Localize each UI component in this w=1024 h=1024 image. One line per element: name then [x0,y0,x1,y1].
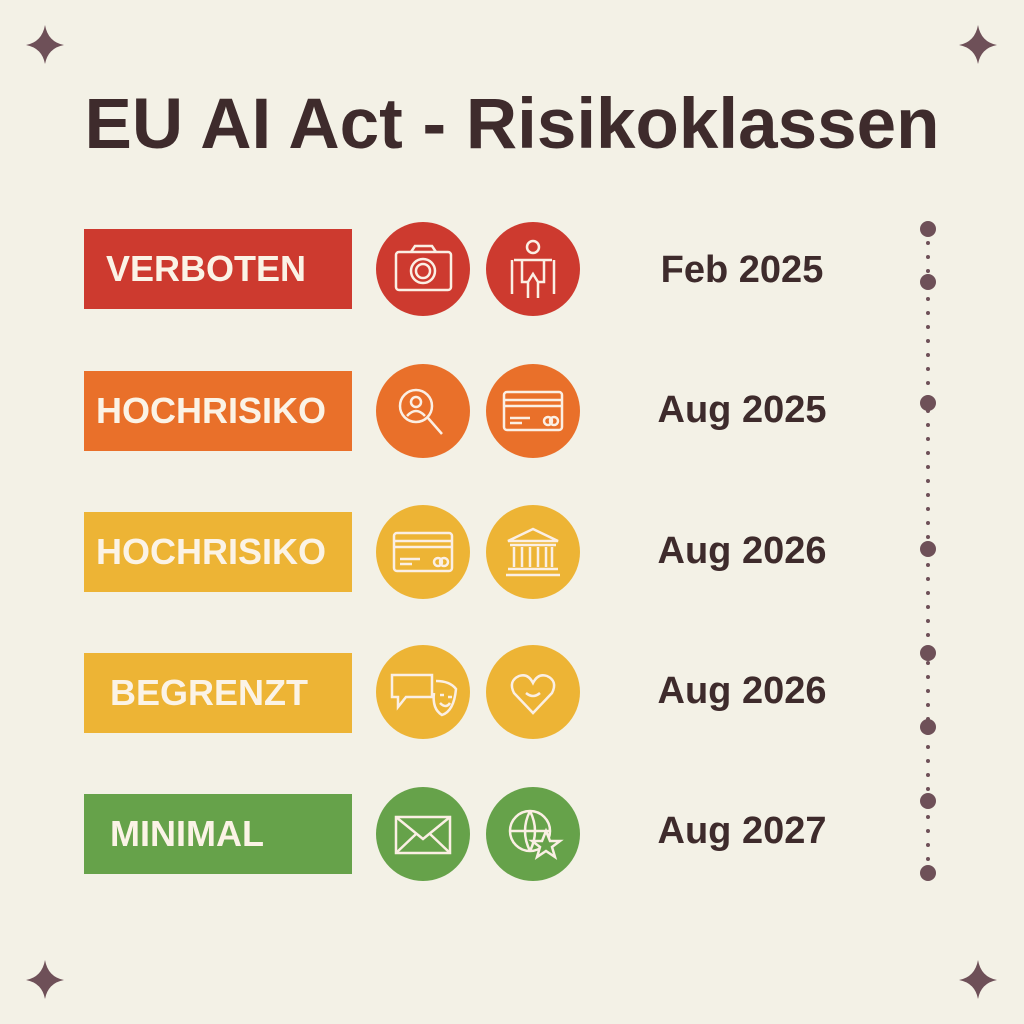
timeline [920,221,936,881]
icon: credit card [486,364,580,458]
bar: Begrenzt [84,653,352,733]
bar: Hochrisiko yellow: HOCHRISIKO [96,531,326,572]
date: Aug 2026 second: Aug 2026 [658,670,826,712]
icon: person with crutches [486,222,580,316]
bar: Minimal: MINIMAL [110,813,264,854]
bar: Hochrisiko orange: HOCHRISIKO [96,390,326,431]
icon: credit card yellow [376,505,470,599]
date: Aug 2027: Aug 2027 [658,810,826,852]
icon: envelope [376,787,470,881]
bar: Verboten [84,229,352,309]
bar: Minimal [84,794,352,874]
icon: building [486,505,580,599]
bar: Begrenzt: BEGRENZT [110,672,308,713]
date: Feb 2025: Feb 2025 [661,249,823,291]
bar: Hochrisiko yellow [84,512,352,592]
icon: search person [376,364,470,458]
bar: Verboten: VERBOTEN [106,248,306,289]
icon: camera [376,222,470,316]
title: EU AI Act - Risikoklassen [85,85,939,164]
date: Aug 2026: Aug 2026 [658,530,826,572]
icon: heart [486,645,580,739]
date: Aug 2025: Aug 2025 [658,389,826,431]
bar: Hochrisiko orange [84,371,352,451]
icon: globe star [486,787,580,881]
icon: speech and mask [376,645,470,739]
